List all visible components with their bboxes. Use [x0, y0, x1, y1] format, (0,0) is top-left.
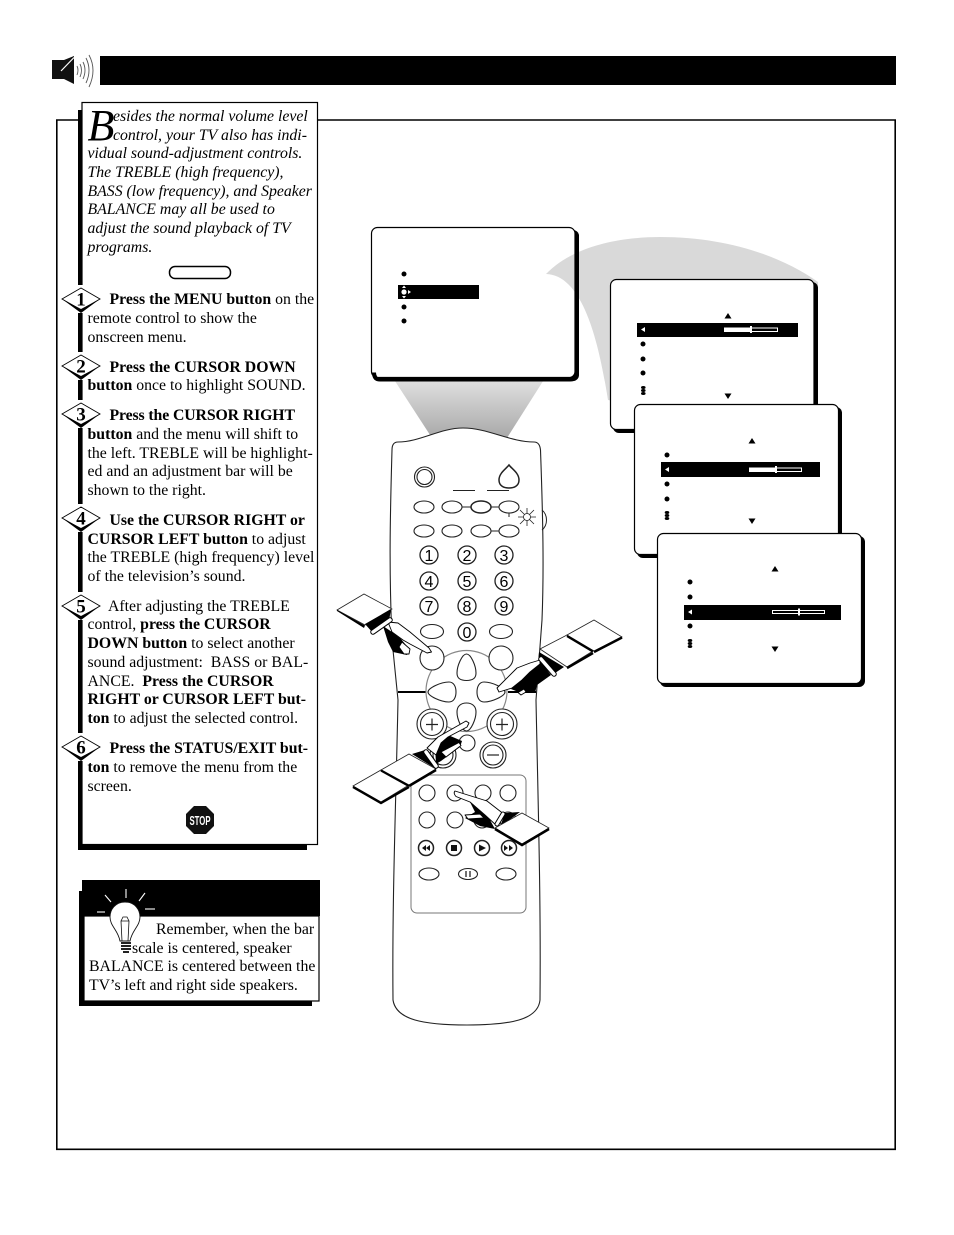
step 3: Press the CURSOR RIGHT [110, 407, 295, 424]
remote control [390, 428, 546, 1025]
tip text: TV’s left and right side speakers. [89, 977, 298, 994]
icon: menu button [170, 266, 230, 278]
hand: bottom right, step 6 [454, 791, 549, 845]
step 4: CURSOR LEFT button to adjust [88, 531, 306, 548]
step 5: ton to adjust the selected control. [88, 710, 298, 727]
step 3: button and the menu will shift to [88, 426, 298, 443]
step 5: RIGHT or CURSOR LEFT but- [88, 691, 306, 708]
icon: speaker [52, 55, 93, 87]
screen 1 base [372, 228, 579, 381]
intro text: programs. [86, 239, 152, 256]
step 4: the TREBLE (high frequency) level [88, 549, 315, 566]
hand: top left, step 1 [337, 594, 432, 655]
step 3: shown to the right. [88, 482, 206, 499]
intro text: vidual sound-adjustment controls. [88, 145, 302, 162]
cursor pad [420, 646, 513, 732]
step 1: remote control to show the [88, 310, 257, 327]
icon: stop sign: STOP [190, 814, 210, 828]
step 5: After adjusting the TREBLE [108, 598, 290, 615]
number keypad: 0 [463, 625, 472, 642]
number keypad: 1 [425, 548, 434, 565]
grey swoosh [546, 237, 818, 440]
step 3 [62, 403, 313, 499]
step 3: 3 [76, 404, 86, 426]
number keypad [420, 546, 513, 642]
lower button panel [411, 775, 526, 913]
intro text [86, 101, 313, 256]
icon: stop sign [186, 806, 214, 834]
screen 2: treble [610, 280, 818, 433]
step 5: 5 [76, 596, 86, 618]
screen 1: main menu [372, 228, 577, 380]
hand: right, step 2 [497, 620, 622, 695]
number keypad: 5 [463, 574, 472, 591]
tip text: BALANCE is centered between the [89, 958, 315, 975]
step 5: sound adjustment: BASS or BAL- [88, 654, 308, 671]
power and mute buttons [414, 465, 519, 490]
number keypad: 2 [463, 548, 472, 565]
number keypad: 4 [425, 574, 434, 591]
intro text: BALANCE may all be used to [88, 201, 275, 218]
step 1: Press the MENU button on the [110, 291, 314, 308]
step 5: ANCE. Press the CURSOR [88, 673, 274, 690]
icon: light bulb [97, 889, 155, 953]
ellipse button rows [414, 501, 519, 537]
step 5: control, press the CURSOR [88, 616, 271, 633]
step 1 [62, 288, 314, 346]
tip text: scale is centered, speaker [132, 940, 292, 957]
number keypad: 7 [425, 599, 434, 616]
side button and light icon [518, 508, 546, 530]
number keypad: 9 [500, 599, 509, 616]
step 2: button once to highlight SOUND. [88, 377, 306, 394]
screen 4: balance [658, 534, 865, 687]
panel: instructions [62, 101, 318, 850]
number keypad: 3 [500, 548, 509, 565]
volume and channel buttons [417, 709, 517, 768]
intro text: BASS (low frequency), and Speaker [88, 183, 313, 200]
step 1: onscreen menu. [88, 329, 187, 346]
step 4 [62, 507, 315, 585]
intro text: The TREBLE (high frequency), [88, 164, 283, 181]
hand: bottom left, step 3 [353, 721, 469, 803]
tip text [89, 921, 315, 994]
screen 3: bass [634, 404, 842, 558]
step 6: ton to remove the menu from the [88, 759, 297, 776]
panel: tip [79, 880, 320, 1006]
step 3: the left. TREBLE will be highlight- [88, 445, 313, 462]
remote body [390, 428, 543, 1025]
step 1: 1 [76, 290, 86, 310]
intro text: control, your TV also has indi- [113, 127, 307, 144]
step 6: Press the STATUS/EXIT but- [110, 740, 308, 757]
main frame [57, 120, 895, 1149]
number keypad: 8 [463, 599, 472, 616]
step 2: 2 [76, 356, 86, 378]
step 6: screen. [88, 778, 132, 795]
intro text: B [88, 101, 114, 150]
step 3: ed and an adjustment bar will be [88, 463, 293, 480]
step 4: Use the CURSOR RIGHT or [110, 512, 305, 529]
step 6: 6 [76, 738, 86, 758]
step 6 [62, 736, 308, 795]
number keypad: 6 [500, 574, 509, 591]
step 5 [62, 595, 308, 727]
step 2: Press the CURSOR DOWN [110, 359, 296, 376]
step 4: of the television’s sound. [88, 568, 245, 585]
tip text: Remember, when the bar [156, 921, 315, 938]
intro text: esides the normal volume level [113, 108, 308, 125]
step 2 [62, 355, 306, 394]
projection beam [393, 378, 545, 438]
header bar [100, 56, 896, 85]
step 5: DOWN button to select another [88, 635, 295, 652]
intro text: adjust the sound playback of TV [88, 220, 293, 237]
step 4: 4 [76, 508, 86, 530]
divider lines [398, 691, 536, 693]
